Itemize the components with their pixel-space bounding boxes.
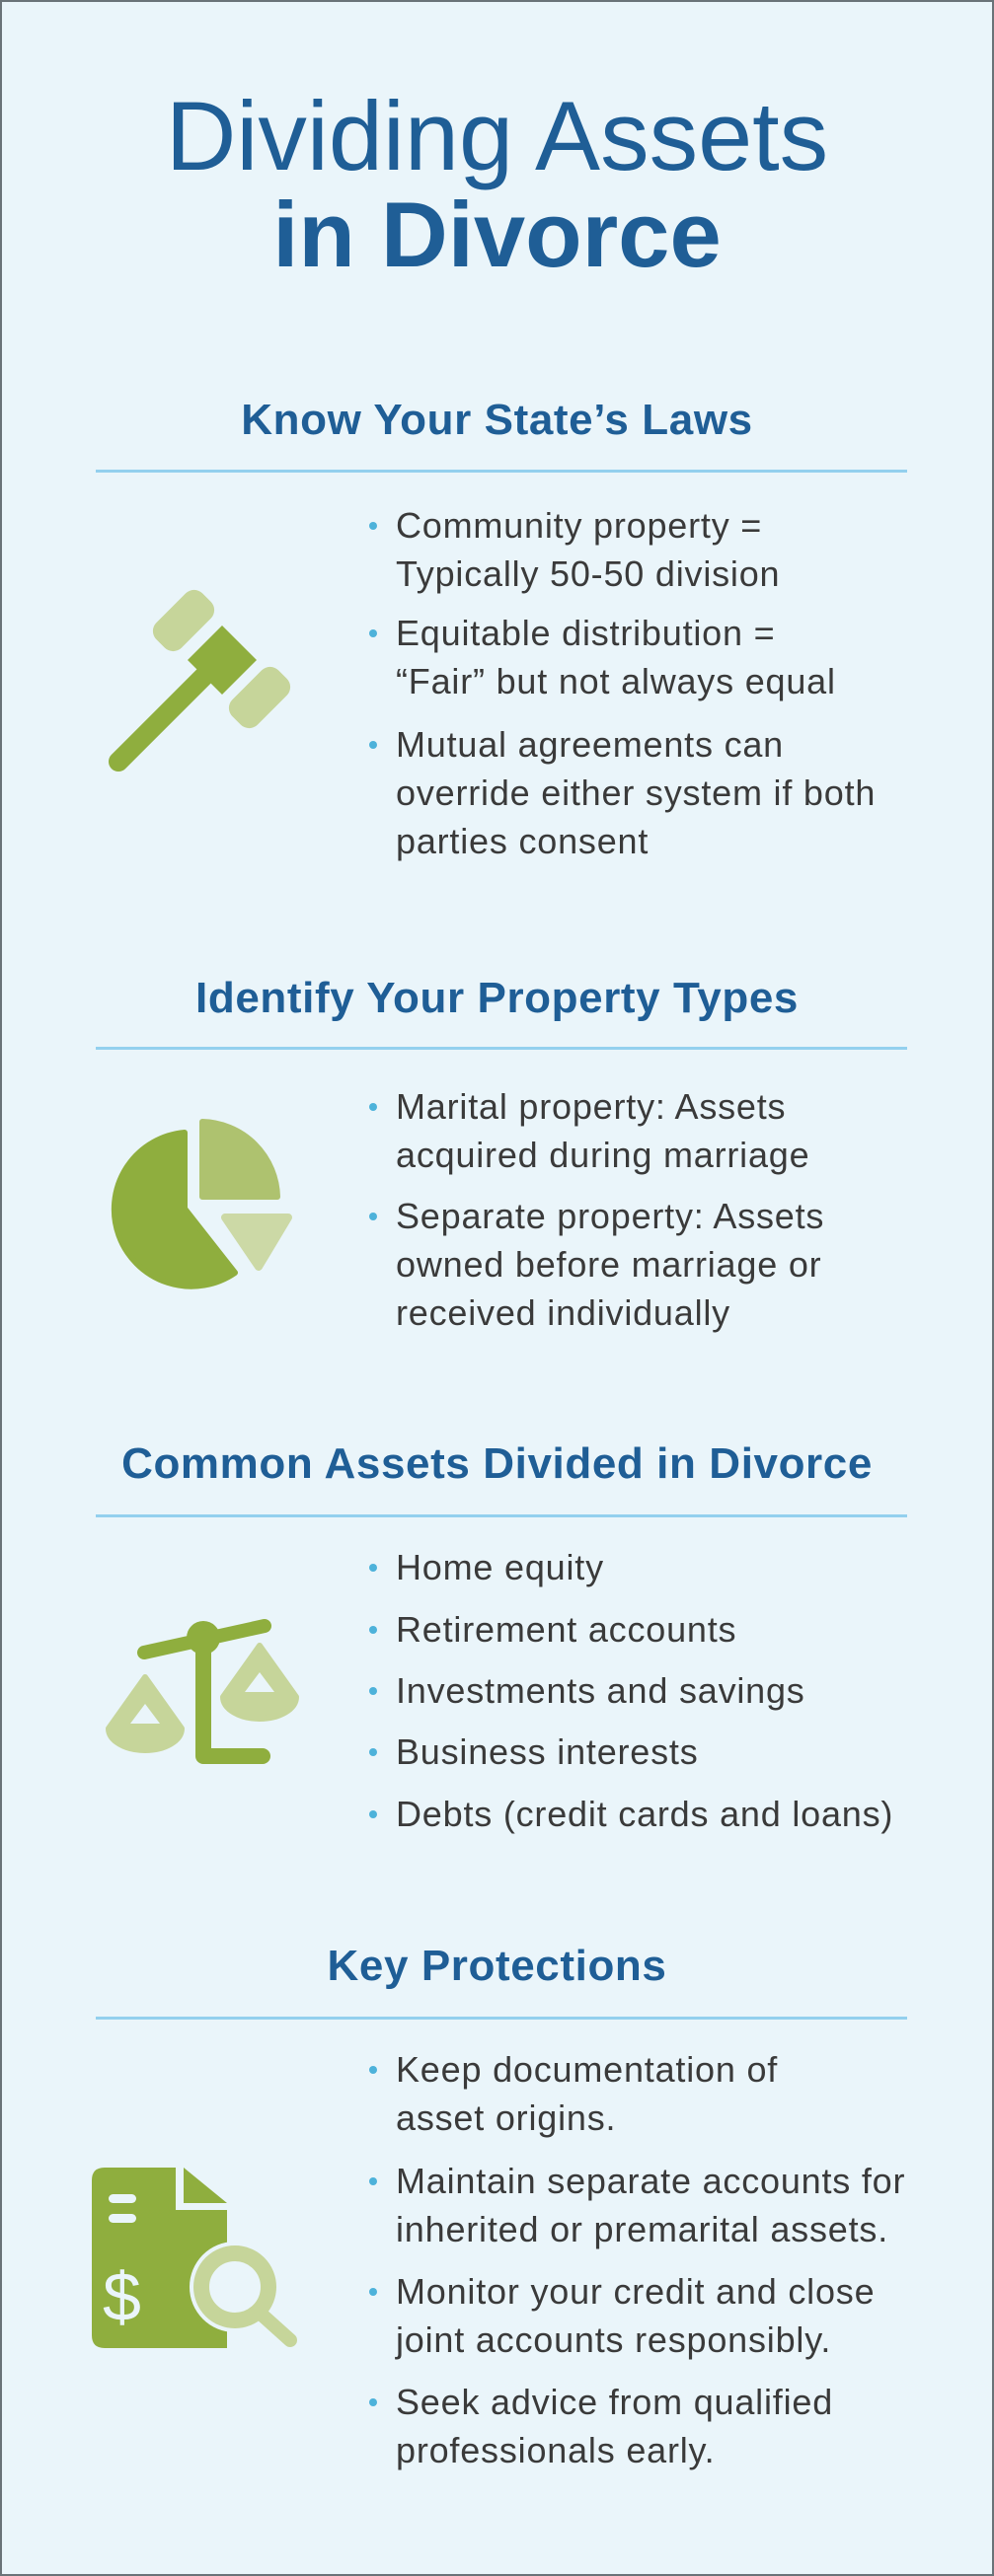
title: Dividing Assets: [166, 81, 828, 190]
list: common assets: Debts (credit cards and loans): [396, 1794, 893, 1834]
list: key protections: Maintain separate accounts for: [396, 2161, 905, 2201]
heading: know your state's laws: Know Your State’s Laws: [241, 396, 753, 444]
list: key protections: joint accounts responsibly.: [396, 2319, 831, 2360]
list: common assets: Home equity: [396, 1547, 604, 1587]
list: key protections: Monitor your credit and close: [396, 2271, 875, 2312]
list: key protections: asset origins.: [396, 2098, 616, 2138]
list: state laws: “Fair” but not always equal: [396, 661, 836, 701]
list: common assets: [369, 1547, 893, 1834]
list: state laws: override either system if both: [396, 773, 876, 813]
list: key protections: Seek advice from qualified: [396, 2382, 833, 2422]
list: state laws: Equitable distribution =: [396, 613, 775, 653]
list: state laws: [369, 505, 876, 861]
list: state laws: parties consent: [396, 821, 649, 861]
icon: document with magnifier: $: [103, 2258, 141, 2335]
heading: property types: Identify Your Property Types: [195, 974, 799, 1022]
list: key protections: inherited or premarital assets.: [396, 2209, 888, 2249]
list: common assets: Investments and savings: [396, 1670, 805, 1711]
list: state laws: Mutual agreements can: [396, 724, 784, 765]
list: common assets: Retirement accounts: [396, 1609, 736, 1650]
title: in Divorce: [272, 183, 722, 286]
list: property types: [369, 1086, 824, 1333]
list: property types: received individually: [396, 1292, 730, 1333]
heading: key protections: Key Protections: [328, 1942, 666, 1990]
list: property types: owned before marriage or: [396, 1244, 821, 1285]
list: key protections: professionals early.: [396, 2430, 715, 2470]
list: property types: Separate property: Assets: [396, 1196, 824, 1236]
list: state laws: Community property =: [396, 505, 762, 546]
list: key protections: [369, 2049, 905, 2470]
list: property types: Marital property: Assets: [396, 1086, 786, 1127]
list: key protections: Keep documentation of: [396, 2049, 778, 2090]
list: property types: acquired during marriage: [396, 1135, 809, 1175]
title: [166, 81, 828, 286]
heading: common assets: Common Assets Divided in Divorce: [121, 1439, 873, 1488]
list: state laws: Typically 50-50 division: [396, 553, 780, 594]
list: common assets: Business interests: [396, 1731, 699, 1772]
